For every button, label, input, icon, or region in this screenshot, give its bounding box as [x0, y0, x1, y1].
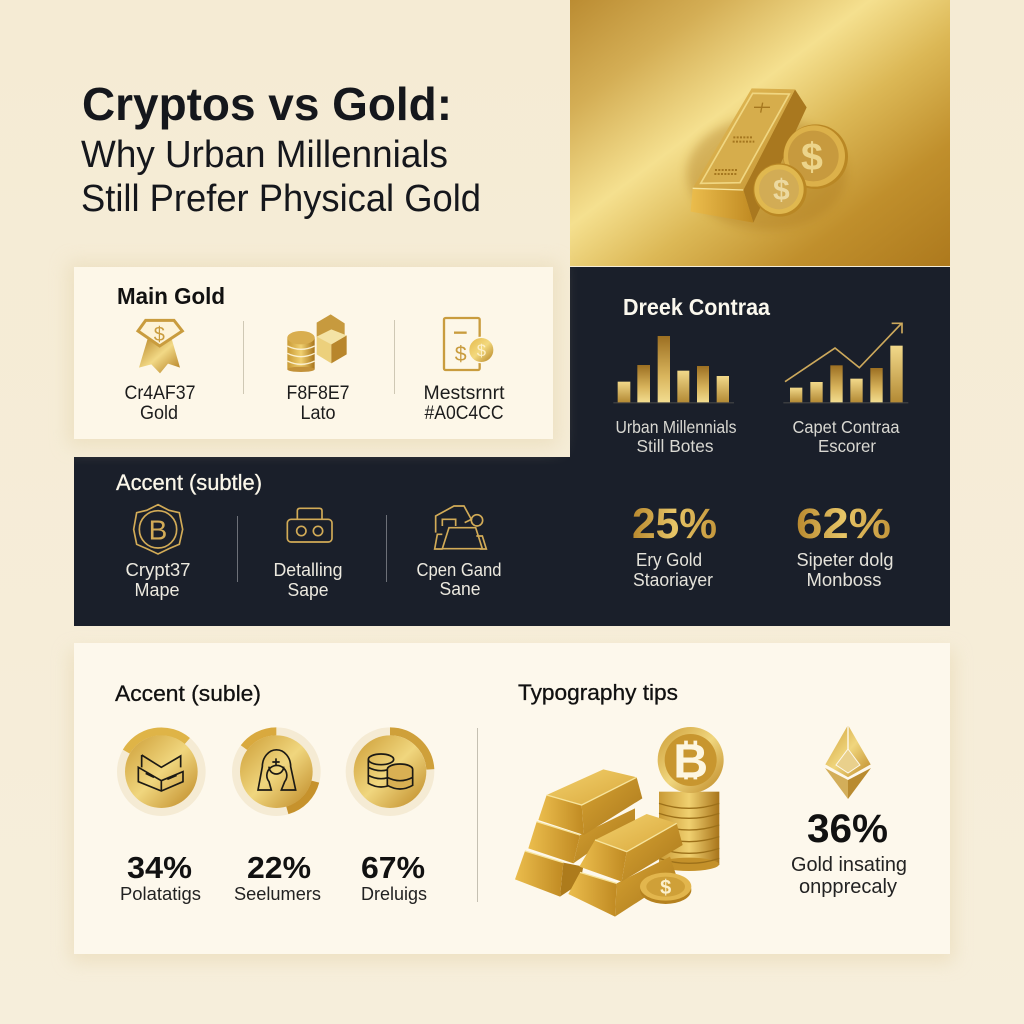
- label: gold insating: Gold insating: [791, 854, 907, 876]
- label: polatatigs: Polatatigs: [120, 883, 201, 904]
- title: Cryptos vs Gold:: [82, 78, 452, 130]
- label: onpprecaly: onpprecaly: [799, 876, 897, 898]
- icon: document with coin: $: [455, 342, 467, 366]
- icon: document with coin: $: [477, 341, 486, 360]
- icon: gold bar with coins: $: [773, 174, 790, 207]
- label: sane: Sane: [440, 578, 480, 599]
- label: capet contraa: Capet Contraa: [792, 417, 900, 437]
- label: sape: Sape: [288, 579, 328, 600]
- stat: 67 percent: 67%: [361, 850, 425, 885]
- icon: ribbon badge: $: [154, 324, 165, 346]
- panel: dark contrast: [74, 267, 950, 626]
- panel: hero gold image: [570, 0, 950, 266]
- bar chart: urban millennials: [613, 336, 734, 403]
- icon: open gold: [435, 506, 486, 549]
- heading: main gold: Main Gold: [117, 283, 225, 309]
- divider: [237, 516, 238, 582]
- label: seelumers: Seelumers: [234, 883, 321, 904]
- divider: [243, 321, 244, 394]
- label: open gold: Cpen Gand: [416, 559, 502, 580]
- icon: gold ring with arch: [232, 727, 321, 816]
- icon: gold ring with envelope: [117, 727, 206, 816]
- label: sipeter dolg: Sipeter dolg: [796, 549, 894, 570]
- bar and line chart: capet contraa: [783, 323, 908, 403]
- lower right bar: [568, 857, 677, 917]
- label: accent code: #A0C4CC: [424, 403, 504, 424]
- lower left bars: [515, 808, 635, 897]
- label: dreluigs: Dreluigs: [361, 883, 427, 904]
- label: detailing: Detalling: [274, 559, 342, 580]
- stat: 34 percent: 34%: [127, 850, 192, 885]
- label: mape: Mape: [134, 579, 180, 600]
- stat: 62 percent: 62%: [796, 500, 891, 548]
- heading: dreek contraa: Dreek Contraa: [623, 294, 770, 320]
- stat: 36 percent: 36%: [807, 807, 888, 851]
- divider: [477, 728, 478, 902]
- panel: contrast charts: [613, 294, 908, 456]
- label: monboss: Monboss: [806, 569, 882, 590]
- illustration: gold bars and coin stack: [515, 727, 724, 917]
- heading: typography tips: Typography tips: [518, 680, 678, 705]
- bitcoin coin: [658, 727, 724, 793]
- divider: [386, 515, 387, 582]
- label: metric: Mestsrnrt: [424, 383, 505, 404]
- icon: gold bar with coins: [687, 88, 848, 230]
- icon: ethereum diamond: [825, 725, 871, 799]
- label: urban millennials: Urban Millennials: [616, 417, 737, 437]
- label: off-white code: F8F8E7: [286, 383, 350, 404]
- icon: document with coin: [444, 318, 494, 370]
- heading: accent suble: Accent (suble): [115, 681, 261, 706]
- icon: coin stack and box: [287, 314, 347, 372]
- title block: [81, 78, 481, 220]
- icon: gold ring with coins: [346, 727, 434, 816]
- stat: 22 percent: 22%: [247, 850, 311, 885]
- small dollar coin: $: [660, 877, 671, 899]
- top left bar: [538, 769, 642, 835]
- icon: bitcoin badge: [134, 505, 183, 554]
- coin stack: [659, 792, 719, 871]
- label: staoriayer: Staoriayer: [633, 569, 713, 590]
- bitcoin coin: B: [673, 734, 708, 788]
- icon: ribbon badge: [138, 320, 182, 373]
- label: still botes: Still Botes: [636, 436, 714, 456]
- icon: case: [287, 508, 332, 542]
- small dollar coin: [640, 873, 691, 904]
- top right bar: [579, 814, 683, 882]
- label: gold: Gold: [140, 403, 178, 424]
- subtitle line two: Still Prefer Physical Gold: [81, 178, 481, 220]
- heading: accent subtle: Accent (subtle): [116, 470, 262, 495]
- label: ery gold: Ery Gold: [636, 549, 702, 570]
- panel: dark stats: [632, 500, 894, 590]
- divider: [394, 320, 395, 394]
- stat: 25 percent: 25%: [632, 500, 717, 548]
- label: gold code: Cr4AF37: [124, 383, 196, 404]
- icon: gold bar with coins: $: [801, 135, 823, 179]
- panel: main gold: [68, 262, 558, 446]
- panel: bottom card: [70, 643, 954, 962]
- label: escorer: Escorer: [818, 436, 876, 456]
- subtitle line one: Why Urban Millennials: [81, 134, 448, 176]
- icon: bitcoin badge: B: [149, 514, 167, 545]
- label: lato: Lato: [300, 403, 336, 424]
- label: crypto: Crypt37: [126, 559, 190, 580]
- panel: accent icons on dark: [116, 470, 502, 600]
